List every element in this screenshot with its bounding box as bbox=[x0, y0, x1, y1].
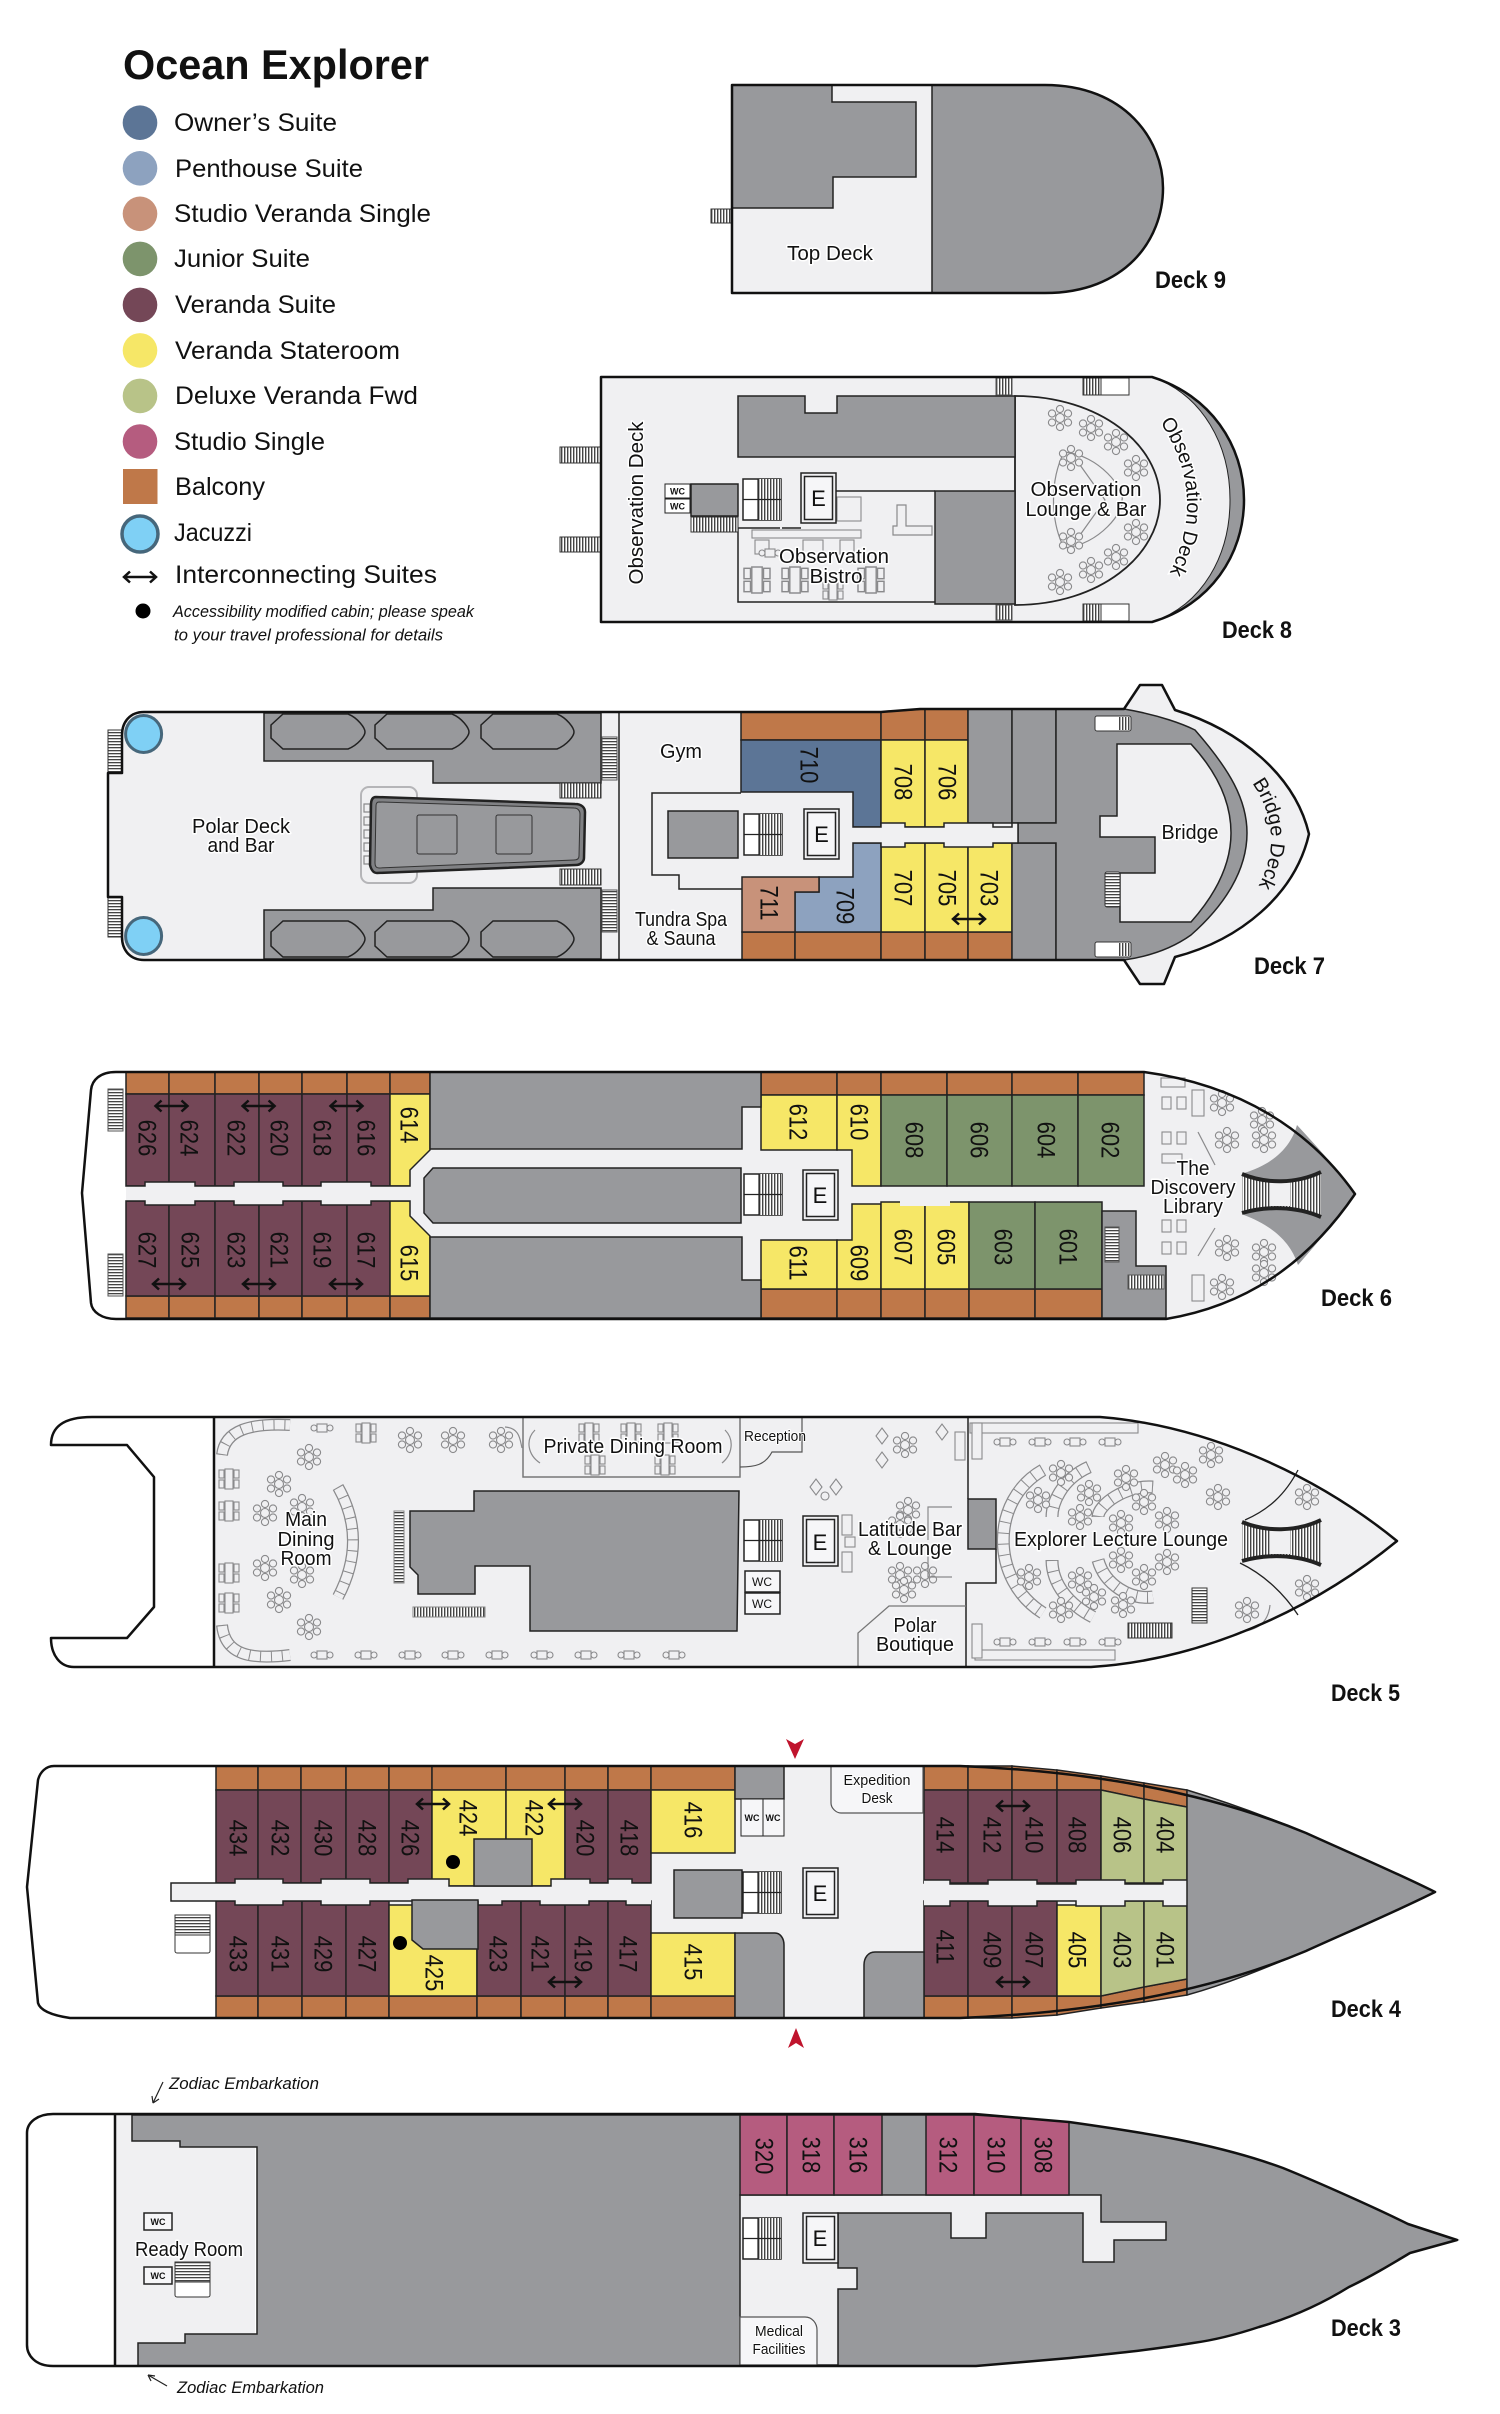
deck 6 cabin numbers: 604 bbox=[1032, 1122, 1060, 1158]
deck 6 cabin numbers: 614 bbox=[395, 1107, 423, 1143]
deck 4 cabin numbers: 426 bbox=[396, 1820, 424, 1856]
aft observation deck label: Observation Deck bbox=[626, 420, 648, 584]
legend: Owner's Suite bbox=[123, 105, 337, 140]
deck 6 bow wedge bbox=[1244, 1125, 1355, 1265]
discovery library label: Library bbox=[1163, 1196, 1223, 1218]
reception box bbox=[740, 1417, 802, 1467]
deck 3 outline bbox=[27, 2114, 1457, 2366]
reception label: Reception bbox=[744, 1428, 806, 1445]
polar deck label: Polar Deck bbox=[192, 816, 291, 838]
deck 4 forward corridor walls bbox=[924, 1880, 1187, 1906]
deck 5 elevator bbox=[803, 1516, 838, 1566]
deck 6 cabin numbers: 619 bbox=[308, 1232, 336, 1268]
polar deck label: and Bar bbox=[208, 835, 275, 857]
legend: Veranda Suite bbox=[123, 288, 336, 322]
legend: Junior Suite: Junior Suite bbox=[174, 245, 310, 273]
deck 7 cabins bbox=[741, 740, 1012, 932]
deck 4 name: Deck 4 bbox=[1331, 1996, 1402, 2023]
deck 6 corridor walls bbox=[126, 1182, 410, 1205]
legend: accessibility note: Accessibility modified cabin; please speak bbox=[172, 602, 475, 621]
main dining room label: Room bbox=[280, 1548, 332, 1570]
deck 5 forward service block bbox=[968, 1499, 996, 1549]
medical facilities label: Medical bbox=[755, 2323, 803, 2340]
deck 5 stairs bbox=[744, 1520, 782, 1561]
deck 7 outline bbox=[108, 685, 1309, 984]
deck 4 cabin numbers: 415 bbox=[679, 1944, 707, 1980]
deck 4 outline bbox=[27, 1766, 1435, 2018]
legend: accessibility note bbox=[136, 602, 475, 644]
deck 6 cabin numbers: 603 bbox=[989, 1229, 1017, 1265]
deck 4 cabin numbers: 418 bbox=[615, 1820, 643, 1856]
legend: Penthouse Suite: Penthouse Suite bbox=[175, 155, 363, 183]
deck 4 cabin numbers: 423 bbox=[484, 1936, 512, 1972]
deck 4 elevator bbox=[803, 1868, 838, 1918]
deck 8 elevator: E bbox=[811, 486, 826, 511]
legend: Owner's Suite: Owner’s Suite bbox=[174, 109, 337, 137]
deck 8 stairs bbox=[691, 517, 738, 532]
deck 3 cabin numbers: 310 bbox=[982, 2137, 1010, 2173]
deck 4 stairs bbox=[743, 1872, 781, 1913]
deck 3 cabin numbers: 308 bbox=[1029, 2137, 1057, 2173]
deck 4 plan bbox=[27, 1739, 1435, 2048]
deck 6 gray aft blocks bbox=[424, 1072, 761, 1318]
deck 4 cabin numbers: 412 bbox=[978, 1817, 1006, 1853]
legend: Studio Single bbox=[123, 424, 325, 459]
deck 7 cabin numbers: 711 bbox=[755, 885, 783, 921]
deck 8 service blocks bbox=[738, 396, 1015, 457]
deck 7 corridor walls bbox=[853, 823, 1018, 847]
deck 7 stairs bbox=[560, 737, 617, 932]
deck 4 cabin numbers: 416 bbox=[679, 1802, 707, 1838]
observation lounge label bbox=[1026, 479, 1147, 521]
lecture lounge furniture bbox=[970, 1423, 1319, 1660]
deck 6 cabin numbers: 623 bbox=[222, 1232, 250, 1268]
lounge divider walls bbox=[966, 1417, 996, 1667]
lifeboats bbox=[271, 714, 574, 957]
zodiac embarkation top bbox=[152, 2074, 319, 2103]
red entry arrow bottom bbox=[788, 2028, 804, 2048]
jacuzzi starboard bbox=[126, 918, 162, 954]
deck 5 name: Deck 5 bbox=[1331, 1680, 1400, 1707]
legend: Studio Single: Studio Single bbox=[174, 428, 325, 456]
deck 7 elevator: E bbox=[814, 822, 829, 847]
deck 3 elevator: E bbox=[813, 2226, 827, 2251]
deck 3 name: Deck 3 bbox=[1331, 2315, 1401, 2342]
deck 7 cabin numbers: 706 bbox=[933, 764, 961, 800]
observation bistro label bbox=[779, 546, 889, 588]
deck 8 bow crescent bbox=[1152, 377, 1244, 622]
deck 8 forward service block bbox=[935, 491, 1015, 604]
deck 6 cabin numbers: 602 bbox=[1096, 1122, 1124, 1158]
expedition desk label: Expedition bbox=[844, 1772, 910, 1789]
deck 4 gray bow bbox=[1187, 1790, 1435, 1995]
legend: Penthouse Suite bbox=[123, 151, 363, 186]
deck 6 notch between 607 and 605 bbox=[900, 1201, 950, 1206]
lower lifeboat bay bbox=[264, 888, 601, 959]
expedition desk label: Desk bbox=[862, 1790, 893, 1807]
deck 6 cabin numbers: 624 bbox=[175, 1120, 203, 1156]
legend: Jacuzzi bbox=[122, 516, 252, 552]
deck 6 cabin numbers: 620 bbox=[265, 1120, 293, 1156]
deck 7 plan: Bridge Deck bbox=[1253, 777, 1285, 890]
latitude bar label bbox=[858, 1519, 962, 1560]
deck 7 cabin numbers: 710 bbox=[795, 747, 823, 783]
deck 6 balconies bbox=[126, 1072, 1144, 1318]
deck 9 floor bbox=[732, 85, 932, 293]
polar boutique walls bbox=[858, 1606, 966, 1667]
deck 3 corridor bbox=[740, 2195, 1166, 2365]
deck 6 cabin numbers: 610 bbox=[845, 1104, 873, 1140]
deck 4 cabin numbers: 403 bbox=[1108, 1932, 1136, 1968]
deck 4 cabins bbox=[216, 1790, 1187, 1996]
deck 6 stairs bbox=[744, 1174, 782, 1215]
deck 6 cabin numbers: 612 bbox=[784, 1104, 812, 1140]
deck 7 cabin numbers bbox=[755, 747, 1003, 924]
deck 6 cabin numbers: 609 bbox=[845, 1245, 873, 1281]
deck 4 cabin numbers: 410 bbox=[1020, 1817, 1048, 1853]
deck 5 floor bbox=[214, 1417, 1397, 1667]
lobby walls bbox=[652, 793, 742, 889]
stern stairs bbox=[108, 730, 122, 937]
deck 6 cabin numbers: 625 bbox=[176, 1232, 204, 1268]
bridge label: Bridge bbox=[1162, 822, 1218, 844]
deck 3 floor bbox=[115, 2114, 255, 2366]
top deck label: Top Deck bbox=[787, 243, 874, 265]
deck 6 cabin numbers bbox=[133, 1104, 1124, 1281]
deck 9 name: Deck 9 bbox=[1155, 267, 1226, 294]
deck 4 interconnecting arrows bbox=[417, 1798, 1029, 1988]
deck 4 cabin numbers: 404 bbox=[1151, 1817, 1179, 1853]
deck 7 gray service bbox=[968, 709, 1056, 960]
bridge deck label bbox=[1252, 783, 1271, 897]
deck 4 cabin numbers: 432 bbox=[266, 1820, 294, 1856]
gray core in 424/422 bbox=[474, 1839, 532, 1886]
polar boutique label: Boutique bbox=[876, 1634, 954, 1656]
zodiac embarkation bottom: Zodiac Embarkation bbox=[176, 2378, 324, 2397]
deck 6 service stairs bbox=[1105, 1227, 1164, 1289]
discovery library label bbox=[1150, 1158, 1236, 1218]
legend: Junior Suite bbox=[123, 242, 310, 276]
latitude bar label: & Lounge bbox=[868, 1538, 952, 1560]
deck 6 cabin numbers: 622 bbox=[222, 1120, 250, 1156]
deck 6 cabin numbers: 615 bbox=[395, 1245, 423, 1281]
bridge fittings bbox=[1095, 716, 1131, 957]
observation bistro label: Observation bbox=[779, 546, 889, 568]
medical facilities label: Facilities bbox=[752, 2341, 806, 2358]
observation bistro label: Bistro bbox=[810, 566, 862, 588]
accessibility dots bbox=[393, 1855, 460, 1950]
deck 4 balconies bbox=[216, 1766, 1187, 2018]
legend: Balcony bbox=[123, 469, 265, 504]
deck 5 central service block bbox=[410, 1491, 739, 1631]
polar bar bbox=[361, 787, 585, 883]
deck 6 stern stairs bbox=[108, 1089, 123, 1296]
deck 8 plan bbox=[560, 376, 1292, 644]
deck 4 cabin numbers: 411 bbox=[931, 1929, 959, 1965]
deck 4 forward corridor bbox=[924, 1880, 1187, 1906]
deck 3 elevator bbox=[803, 2213, 838, 2263]
deck 6 outline bbox=[82, 1072, 1355, 1319]
ready room stairs bbox=[175, 2262, 210, 2297]
deck 6 cabin numbers: 618 bbox=[308, 1120, 336, 1156]
deck 4 cabin numbers: 434 bbox=[224, 1820, 252, 1856]
zodiac embarkation top: Zodiac Embarkation bbox=[168, 2074, 319, 2093]
deck 6 corridor bbox=[126, 1182, 410, 1205]
legend: Interconnecting Suites: Interconnecting Suites bbox=[175, 561, 437, 589]
deck 6 cabins bbox=[126, 1094, 1144, 1296]
deck 5 wc bbox=[745, 1571, 780, 1614]
legend: Deluxe Veranda Fwd bbox=[123, 379, 418, 413]
deck 8 outline bbox=[601, 377, 1244, 622]
deck 8 fittings bbox=[996, 378, 1129, 621]
ready room wc: WC bbox=[150, 2271, 166, 2281]
deck 9 outline bbox=[732, 85, 1163, 293]
deck 4 cabin numbers: 407 bbox=[1020, 1932, 1048, 1968]
deck 7 cabin numbers: 703 bbox=[975, 870, 1003, 906]
deck 4 aft corridor walls bbox=[171, 1879, 651, 1905]
deck 6 cabin numbers: 608 bbox=[900, 1122, 928, 1158]
deck 4 wc: WC bbox=[766, 1813, 781, 1823]
red entry arrow top bbox=[786, 1739, 804, 1759]
tundra spa label: Tundra Spa bbox=[635, 909, 728, 931]
deck 5 plan bbox=[51, 1417, 1400, 1707]
tundra spa label: & Sauna bbox=[646, 928, 716, 950]
deck 4 cabin numbers: 424 bbox=[454, 1800, 482, 1836]
polar boutique label bbox=[876, 1615, 954, 1656]
ready room label: Ready Room bbox=[135, 2239, 243, 2261]
deck 6 plan bbox=[82, 1072, 1392, 1319]
deck 4 cabin numbers: 401 bbox=[1151, 1932, 1179, 1968]
deck 6 interconnecting arrows bbox=[153, 1100, 362, 1290]
deck 4 cabin numbers: 433 bbox=[224, 1936, 252, 1972]
deck 8 plan: Observation Deck bbox=[1162, 416, 1203, 580]
deck 7 corridor bbox=[853, 823, 1018, 847]
title: Ocean Explorer bbox=[123, 41, 429, 88]
polar deck label bbox=[192, 816, 291, 857]
legend: Veranda Stateroom bbox=[123, 333, 400, 368]
private dining room label: Private Dining Room bbox=[544, 1436, 722, 1458]
deck 4 cabin numbers: 406 bbox=[1108, 1817, 1136, 1853]
deck 7 lobby service block bbox=[668, 811, 738, 858]
deck 3 cabin numbers: 318 bbox=[797, 2137, 825, 2173]
deck 4 cabin numbers: 414 bbox=[931, 1817, 959, 1853]
deck 4 cabin numbers: 431 bbox=[266, 1936, 294, 1972]
deck 7 name: Deck 7 bbox=[1254, 953, 1325, 980]
polar boutique label: Polar bbox=[894, 1615, 937, 1637]
deck 3 cabin numbers: 316 bbox=[844, 2137, 872, 2173]
deck 4 cabin numbers: 428 bbox=[353, 1820, 381, 1856]
latitude bar furniture bbox=[810, 1424, 965, 1603]
deck 4 cabin numbers: 417 bbox=[614, 1936, 642, 1972]
deck 4 cabin numbers: 419 bbox=[569, 1936, 597, 1972]
deck 8 service block by wc bbox=[691, 484, 738, 516]
upper lifeboat bay bbox=[264, 713, 601, 783]
deck 4 elevator: E bbox=[813, 1881, 827, 1906]
medical facilities room bbox=[740, 2317, 817, 2365]
deck 4 floor bbox=[216, 1766, 1435, 2018]
discovery library label: The bbox=[1176, 1158, 1210, 1180]
deck 9 stairs bbox=[711, 209, 732, 223]
deck 7 stairs main bbox=[744, 814, 782, 855]
deck 8 wc: WC bbox=[670, 486, 685, 496]
deck 7 cabin numbers: 707 bbox=[889, 870, 917, 906]
deck 7 plan bbox=[106, 684, 1325, 986]
gray core in 425 bbox=[412, 1900, 478, 1949]
main dining furniture bbox=[219, 1423, 731, 1659]
expedition desk bbox=[831, 1766, 923, 1813]
observation lounge label: Lounge & Bar bbox=[1026, 499, 1147, 521]
deck 5 wc: WC bbox=[752, 1597, 772, 1611]
tundra spa label bbox=[635, 909, 728, 950]
deck 8 wc: WC bbox=[670, 502, 685, 512]
deck 6 cabin numbers: 616 bbox=[352, 1120, 380, 1156]
explorer lecture lounge label: Explorer Lecture Lounge bbox=[1014, 1529, 1228, 1551]
legend: Veranda Stateroom: Veranda Stateroom bbox=[175, 337, 400, 365]
deck 4 cabin numbers: 408 bbox=[1063, 1817, 1091, 1853]
deck 6 cabin numbers: 611 bbox=[784, 1245, 812, 1281]
deck 4 cabin numbers: 409 bbox=[978, 1932, 1006, 1968]
deck 7 elevator bbox=[804, 809, 839, 859]
expedition desk label bbox=[844, 1772, 910, 1807]
deck 4 cabin numbers: 422 bbox=[520, 1800, 548, 1836]
legend: accessibility note: to your travel professional for details bbox=[174, 626, 443, 644]
deck 4 cabin numbers: 430 bbox=[309, 1820, 337, 1856]
deck 8 elevator bbox=[801, 473, 836, 523]
discovery library label: Discovery bbox=[1150, 1177, 1236, 1199]
deck 3 plan bbox=[27, 2074, 1457, 2397]
deck 6 cabin numbers: 607 bbox=[889, 1229, 917, 1265]
main dining room label bbox=[278, 1509, 334, 1570]
legend: Jacuzzi: Jacuzzi bbox=[174, 519, 252, 547]
deck 3 cabins bbox=[740, 2115, 1069, 2195]
deck 6 cabin numbers: 605 bbox=[932, 1229, 960, 1265]
observation lounge furniture bbox=[1048, 405, 1148, 595]
deck 7 cabin numbers: 705 bbox=[933, 870, 961, 906]
deck 6 hull fill bbox=[126, 1072, 1355, 1318]
medical facilities label bbox=[752, 2323, 806, 2358]
deck 6 bow stairs bbox=[1242, 1172, 1321, 1217]
deck 6 elevator: E bbox=[813, 1183, 827, 1208]
bridge room bbox=[1100, 744, 1231, 922]
vertical bulkhead bbox=[618, 712, 620, 960]
legend: Deluxe Veranda Fwd: Deluxe Veranda Fwd bbox=[175, 382, 418, 410]
deck 5 forward stairs bbox=[1128, 1588, 1207, 1638]
legend: Studio Veranda Single bbox=[123, 196, 431, 231]
deck 3 cabin numbers: 320 bbox=[750, 2138, 778, 2174]
main dining room label: Dining bbox=[278, 1529, 334, 1551]
deck 3 gray hull bbox=[132, 2115, 1457, 2366]
deck 7 cabin numbers: 709 bbox=[831, 888, 859, 924]
deck 8 name: Deck 8 bbox=[1222, 617, 1292, 644]
discovery library furniture bbox=[1161, 1078, 1276, 1301]
deck 6 cabin numbers: 621 bbox=[265, 1232, 293, 1268]
bistro furniture bbox=[744, 497, 932, 600]
deck 9 forward block bbox=[932, 85, 1163, 293]
observation lounge bbox=[1015, 396, 1160, 605]
deck 9 service block bbox=[732, 85, 916, 208]
deck 6 cabin numbers: 627 bbox=[133, 1232, 161, 1268]
deck 7 interconnecting arrow bbox=[953, 914, 985, 924]
ready room wc bbox=[144, 2213, 172, 2284]
deck 5 bow stairs bbox=[1242, 1520, 1321, 1565]
deck 6 cabin numbers: 626 bbox=[133, 1120, 161, 1156]
deck 7 floor bbox=[108, 685, 1309, 984]
deck 5 wc: WC bbox=[752, 1575, 772, 1589]
deck 4 cabin numbers: 425 bbox=[420, 1955, 448, 1991]
deck 9 plan bbox=[711, 85, 1226, 294]
legend bbox=[122, 105, 475, 644]
deck 6 cabin numbers: 606 bbox=[965, 1122, 993, 1158]
deck 4 wc bbox=[741, 1799, 784, 1836]
deck 4 cabin numbers: 420 bbox=[571, 1820, 599, 1856]
legend: Veranda Suite: Veranda Suite bbox=[175, 291, 336, 319]
latitude bar label: Latitude Bar bbox=[858, 1519, 962, 1541]
deck 8 aft stairs bbox=[560, 447, 601, 552]
deck 7 balconies bbox=[741, 709, 1012, 960]
main dining room label: Main bbox=[285, 1509, 327, 1531]
deck 7 cabin numbers: 708 bbox=[889, 764, 917, 800]
deck 4 cabin numbers bbox=[224, 1800, 1179, 1991]
deck 6 cabin numbers: 601 bbox=[1054, 1229, 1082, 1265]
deck 8 main stairs bbox=[743, 479, 781, 520]
gym label: Gym bbox=[660, 741, 702, 763]
deck 3 stairs bbox=[743, 2218, 781, 2259]
deck 4 wc: WC bbox=[744, 1813, 760, 1823]
observation bistro walls bbox=[738, 491, 935, 602]
deck 4 aft stairs bbox=[175, 1915, 210, 1953]
ready room wc: WC bbox=[150, 2217, 166, 2227]
deck 6 name: Deck 6 bbox=[1321, 1285, 1392, 1312]
legend: Studio Veranda Single: Studio Veranda Single bbox=[174, 200, 431, 228]
deck 4 aft corridor bbox=[171, 1879, 651, 1905]
legend: Balcony: Balcony bbox=[175, 473, 265, 501]
deck 3 cabin numbers: 312 bbox=[934, 2137, 962, 2173]
deck 4 gray blocks bbox=[674, 1766, 924, 2018]
deck 4 cabin numbers: 421 bbox=[526, 1936, 554, 1972]
deck 8 wc bbox=[665, 484, 690, 513]
jacuzzi port bbox=[126, 716, 162, 752]
forward observation deck label bbox=[1160, 422, 1187, 590]
deck 4 cabin numbers: 429 bbox=[309, 1936, 337, 1972]
deck 6 cabin numbers: 617 bbox=[352, 1232, 380, 1268]
deck 4 cabin numbers: 405 bbox=[1063, 1932, 1091, 1968]
deck 4 cabin numbers: 427 bbox=[353, 1936, 381, 1972]
deck 3 cabin numbers bbox=[750, 2137, 1057, 2174]
observation lounge label: Observation bbox=[1030, 479, 1142, 501]
deck 5 elevator: E bbox=[813, 1530, 827, 1555]
deck 6 forward service bbox=[1102, 1211, 1166, 1318]
deck 8 floor bbox=[601, 377, 1244, 622]
deck 6 elevator bbox=[803, 1170, 838, 1220]
bridge service area bbox=[1018, 709, 1247, 960]
deck 5 outline bbox=[51, 1417, 1397, 1667]
private dining room box bbox=[523, 1417, 740, 1477]
